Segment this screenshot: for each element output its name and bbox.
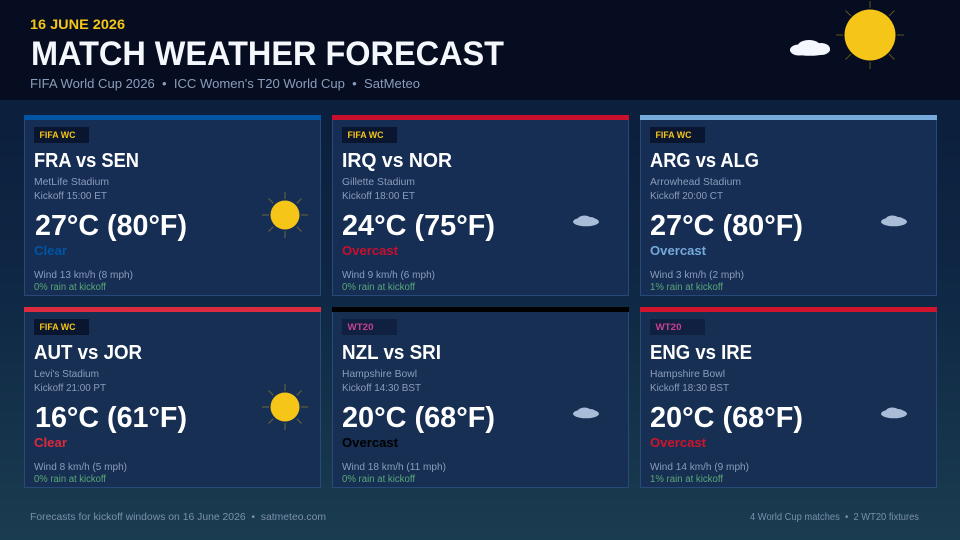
footer right note: 4 World Cup matches • 2 WT20 fixtures [750, 511, 919, 523]
badge: FIFA WC [342, 127, 397, 143]
kickoff: Kickoff 15:00 ET [34, 190, 108, 202]
temperature: 20°C (68°F) [650, 402, 803, 434]
condition: Overcast [342, 243, 399, 258]
icon: cloud [881, 216, 907, 226]
panel: NZL vs SRI [332, 307, 629, 488]
badge: FIFA WC [34, 127, 89, 143]
temperature: 16°C (61°F) [35, 402, 187, 434]
rain chance: 1% rain at kickoff [650, 474, 723, 485]
badge: WT20 [650, 319, 705, 335]
condition: Clear [34, 435, 67, 450]
icon: header sun [836, 1, 904, 69]
venue: Levi's Stadium [34, 368, 99, 380]
panel: FRA vs SEN [24, 115, 321, 296]
icon: sun [262, 384, 308, 430]
temperature: 20°C (68°F) [342, 402, 495, 434]
panel: ENG vs IRE [640, 307, 937, 488]
panel: ARG vs ALG [640, 115, 937, 296]
icon: header cloud [790, 40, 830, 56]
kickoff: Kickoff 20:00 CT [650, 190, 724, 202]
date: 16 JUNE 2026 [30, 16, 125, 32]
badge: FIFA WC: FIFA WC [656, 130, 692, 141]
wind: Wind 8 km/h (5 mph) [34, 461, 127, 473]
rain chance: 0% rain at kickoff [342, 474, 415, 485]
icon: cloud [573, 408, 599, 418]
subtitle: FIFA World Cup 2026 • ICC Women's T20 World Cup • SatMeteo [30, 76, 420, 91]
panel: IRQ vs NOR [332, 115, 629, 296]
condition: Clear [34, 243, 67, 258]
header band [0, 0, 960, 100]
wind: Wind 18 km/h (11 mph) [342, 461, 446, 473]
match name: NZL vs SRI [342, 342, 441, 364]
icon: sun [262, 192, 308, 238]
match name: ENG vs IRE [650, 342, 752, 364]
badge: WT20 [342, 319, 397, 335]
badge: FIFA WC [34, 319, 89, 335]
badge: WT20: WT20 [348, 322, 374, 333]
wind: Wind 3 km/h (2 mph) [650, 269, 744, 281]
match name: FRA vs SEN [34, 150, 139, 172]
badge: FIFA WC [650, 127, 705, 143]
venue: MetLife Stadium [34, 176, 109, 188]
wind: Wind 14 km/h (9 mph) [650, 461, 749, 473]
kickoff: Kickoff 18:30 BST [650, 382, 730, 394]
kickoff: Kickoff 18:00 ET [342, 190, 416, 202]
wind: Wind 9 km/h (6 mph) [342, 269, 435, 281]
venue: Arrowhead Stadium [650, 176, 741, 188]
wind: Wind 13 km/h (8 mph) [34, 269, 133, 281]
temperature: 27°C (80°F) [650, 210, 803, 242]
panel: AUT vs JOR [24, 307, 321, 488]
condition: Overcast [650, 435, 707, 450]
rain chance: 0% rain at kickoff [34, 474, 106, 485]
condition: Overcast [650, 243, 707, 258]
badge: FIFA WC: FIFA WC [40, 322, 76, 333]
badge: WT20: WT20 [656, 322, 682, 333]
temperature: 27°C (80°F) [35, 210, 187, 242]
rain chance: 0% rain at kickoff [34, 282, 106, 293]
kickoff: Kickoff 21:00 PT [34, 382, 107, 394]
match name: AUT vs JOR [34, 342, 143, 364]
rain chance: 1% rain at kickoff [650, 282, 723, 293]
footer left note: Forecasts for kickoff windows on 16 June 2026 • satmeteo.com [30, 511, 326, 523]
rain chance: 0% rain at kickoff [342, 282, 415, 293]
kickoff: Kickoff 14:30 BST [342, 382, 422, 394]
badge: FIFA WC: FIFA WC [40, 130, 76, 141]
venue: Hampshire Bowl [650, 368, 725, 380]
venue: Hampshire Bowl [342, 368, 417, 380]
badge: FIFA WC: FIFA WC [348, 130, 384, 141]
match name: ARG vs ALG [650, 150, 759, 172]
icon: cloud [881, 408, 907, 418]
match name: IRQ vs NOR [342, 150, 453, 172]
icon: cloud [573, 216, 599, 226]
temperature: 24°C (75°F) [342, 210, 495, 242]
condition: Overcast [342, 435, 399, 450]
title: MATCH WEATHER FORECAST [31, 35, 504, 73]
venue: Gillette Stadium [342, 176, 415, 188]
